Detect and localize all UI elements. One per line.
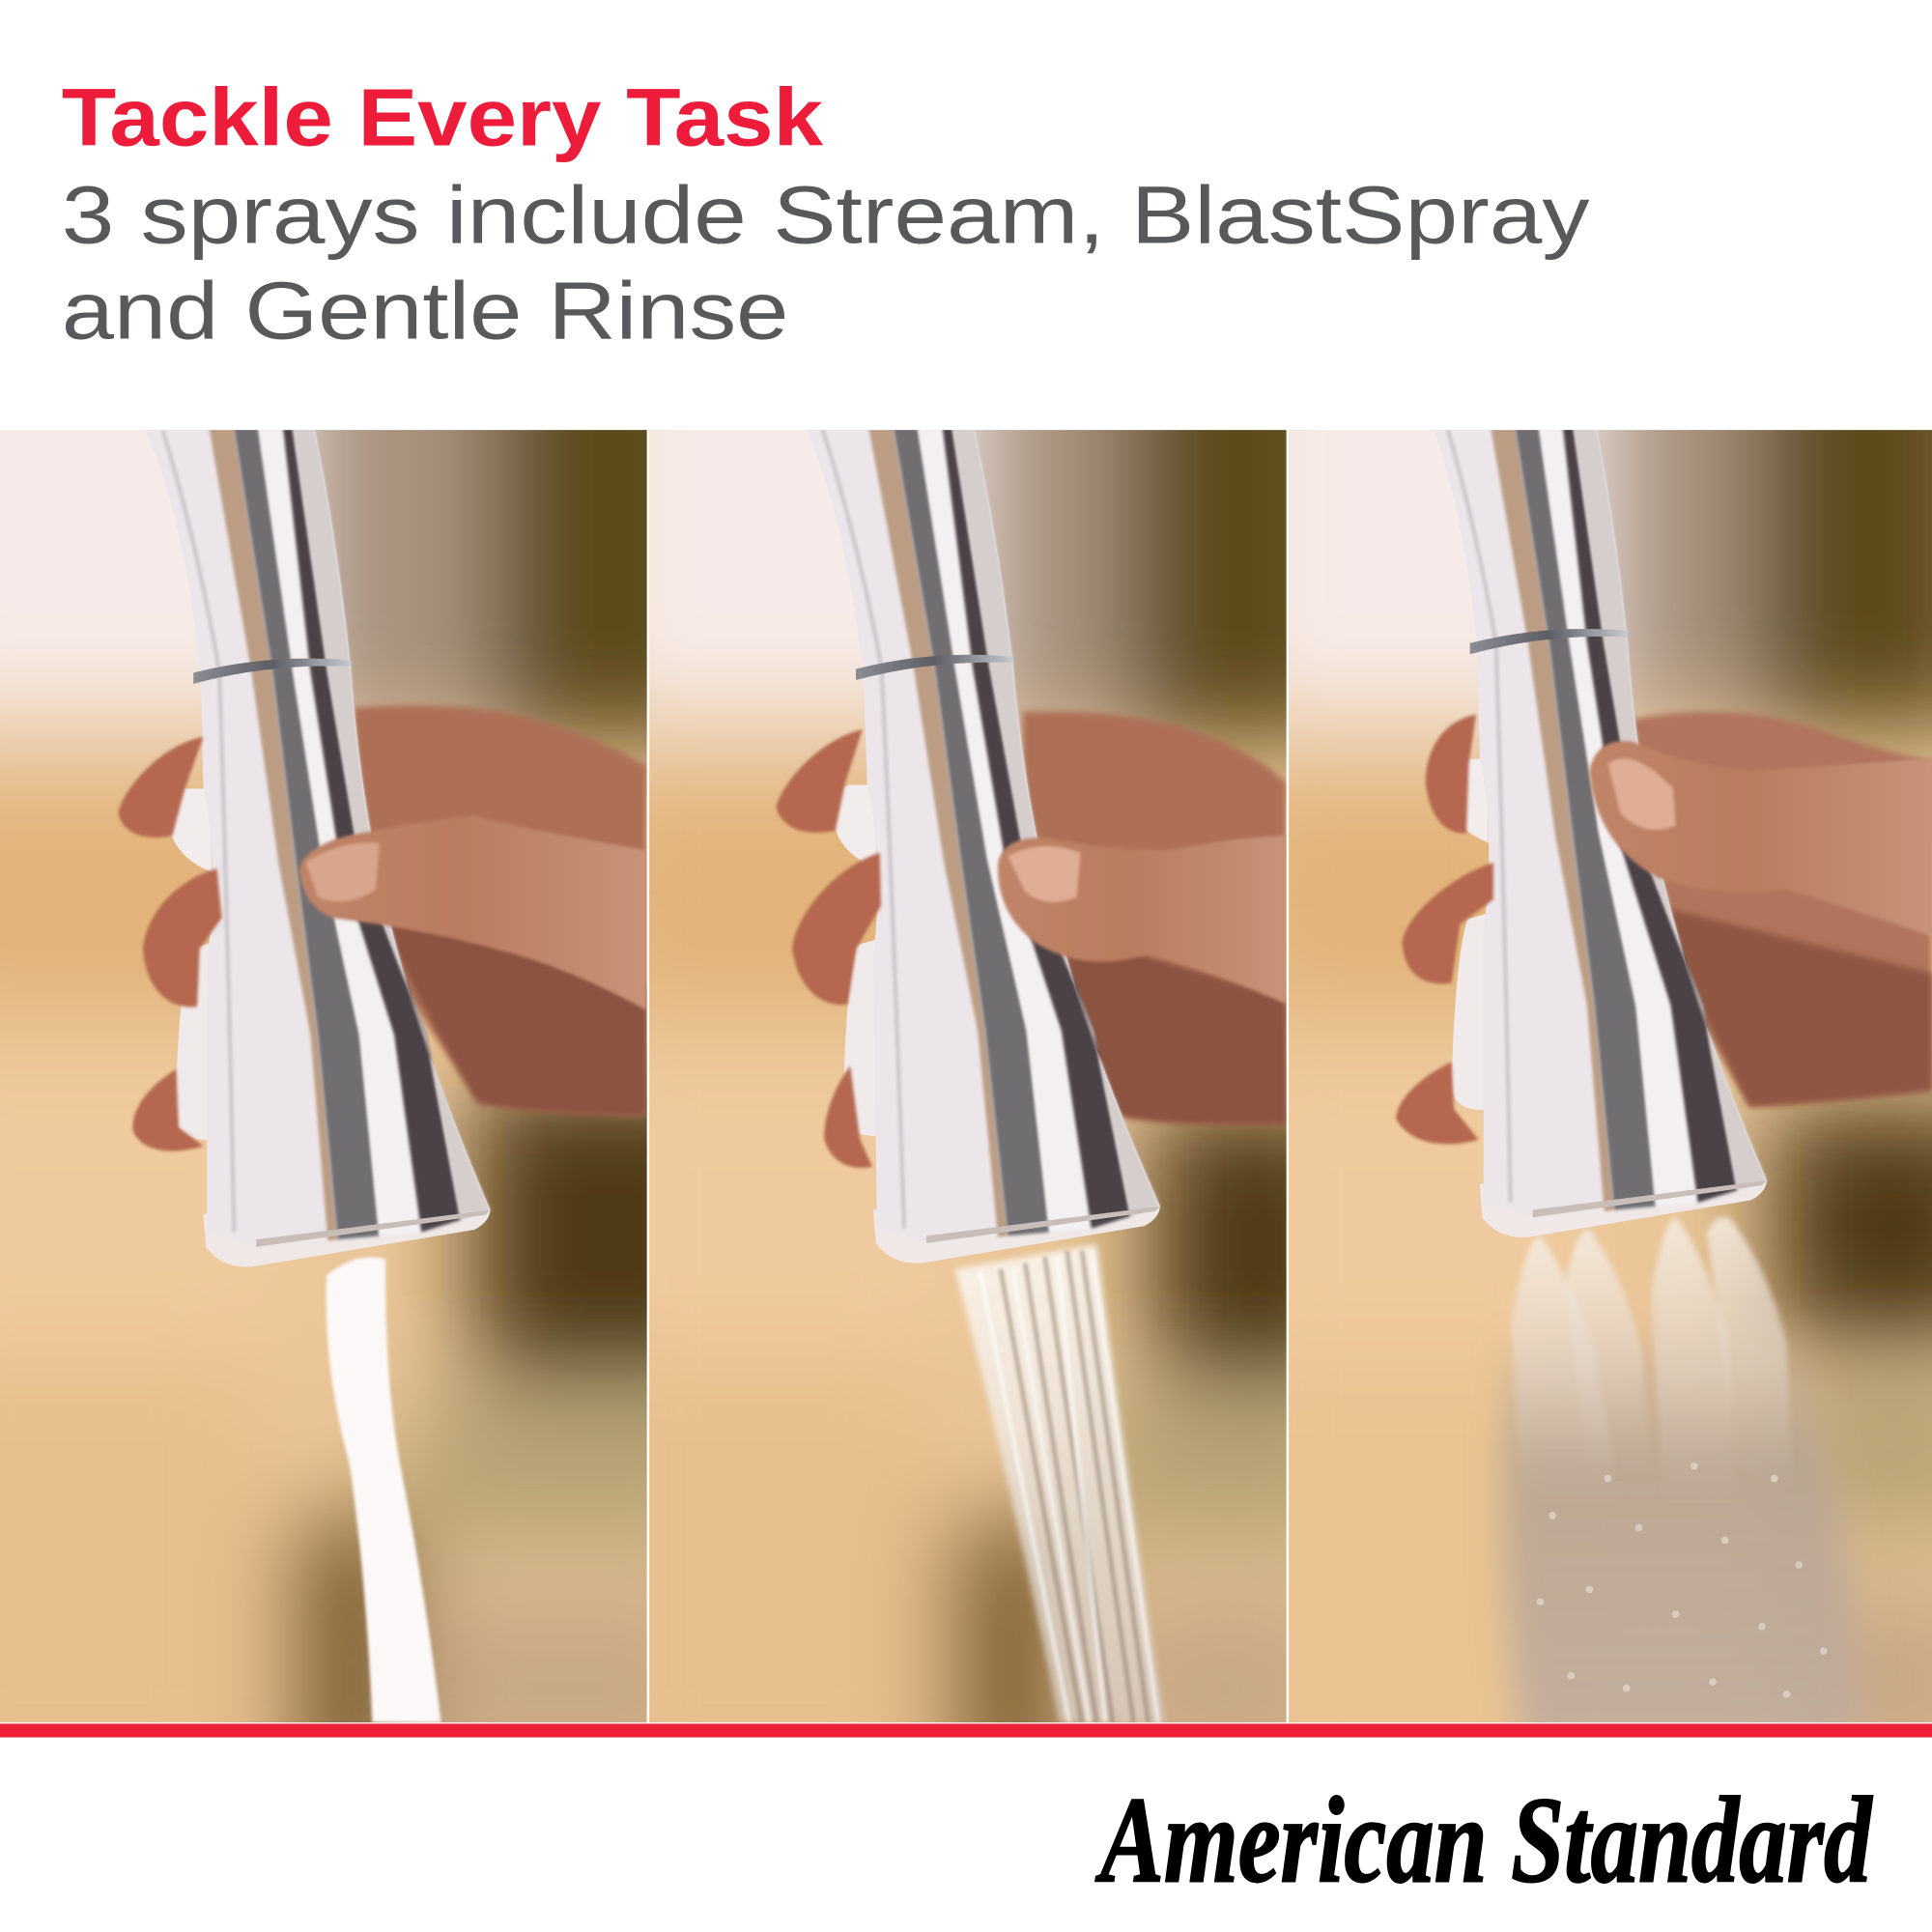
hand: back of hand (1023, 712, 1287, 1124)
title: Tackle Every Task: Tackle Every Task (62, 72, 823, 163)
panel: blast spray (649, 430, 1287, 1723)
faucet: panel three (1434, 430, 1768, 1237)
hand: thumb (299, 815, 647, 1010)
water spray (955, 1244, 1164, 1722)
hand: back of hand (1627, 712, 1932, 1106)
faucet: panel one (146, 430, 493, 1267)
faucet: panel two (807, 430, 1161, 1264)
red divider bar (0, 1723, 1932, 1737)
subtitle line two: and Gentle Rinse (62, 266, 788, 356)
panel: stream spray (0, 430, 647, 1723)
subtitle line one: 3 sprays include Stream, BlastSpray (62, 169, 1589, 260)
heading (62, 72, 1589, 356)
water mist (1502, 1217, 1861, 1749)
hand: fingers behind (118, 737, 222, 1151)
hand: thumb (998, 836, 1287, 1005)
hand: fingers behind (777, 729, 881, 1168)
hand: fingers behind (1396, 715, 1493, 1144)
water stream (327, 1257, 441, 1722)
panel: gentle rinse (1289, 430, 1932, 1723)
hand: back of hand (352, 705, 647, 1115)
hand: thumb (1589, 741, 1932, 936)
